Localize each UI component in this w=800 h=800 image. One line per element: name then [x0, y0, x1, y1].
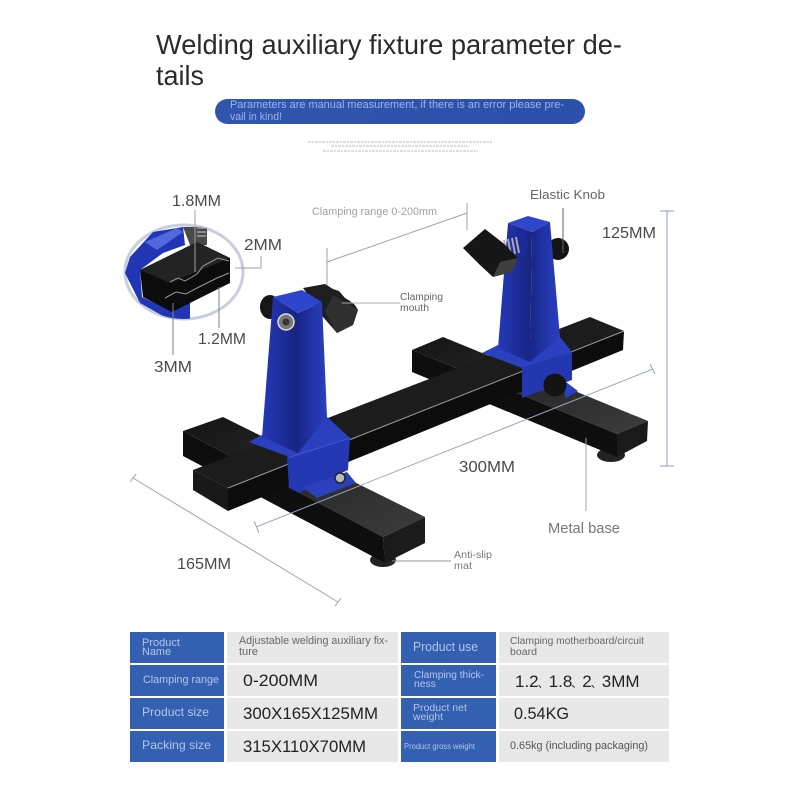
clamping range dimension [327, 203, 467, 285]
measurement labels [154, 193, 656, 573]
row: product net weight: Product net [413, 703, 467, 714]
callout: clamping range: Clamping range 0-200mm [312, 206, 437, 218]
left knob [260, 295, 280, 319]
row: clamping thickness: 1.2 [515, 672, 539, 691]
row: product net weight: weight [412, 712, 443, 723]
row: clamping thickness [401, 665, 669, 696]
row: product size [130, 698, 398, 729]
row: clamping thickness: ness [414, 679, 436, 690]
callout: metal base: Metal base [548, 521, 620, 537]
row: product name: Name [142, 646, 171, 658]
row: packing size: 315X110X70MM [243, 737, 366, 756]
row: product net weight: 0.54KG [514, 704, 569, 723]
title: Welding auxiliary fixture parameter de- [156, 29, 622, 60]
title: tails [156, 60, 204, 91]
row: product size: Product size [142, 705, 209, 719]
left blue column [249, 284, 358, 498]
row: product use [401, 632, 669, 663]
label 3MM: 3MM [154, 359, 192, 376]
dimension lines [130, 203, 674, 606]
callout: clamping mouth: mouth [400, 303, 429, 314]
product photo: soldering fixture [183, 216, 648, 567]
anti-slip mat leader [392, 560, 451, 562]
row: product use: board [510, 647, 537, 658]
label 2MM: 2MM [244, 237, 282, 254]
right bracket front [522, 352, 572, 398]
side screw [278, 314, 294, 330]
right clamp jaw [463, 229, 518, 277]
label 1.8MM: 1.8MM [172, 193, 221, 210]
metal base leader [585, 438, 587, 511]
1.2MM leader [218, 287, 220, 328]
row: clamping thickness: 、1.8、2、3MM [538, 672, 640, 691]
row: product net weight [401, 698, 669, 729]
label 165MM: 165MM [177, 556, 231, 573]
row: product size: 300X165X125MM [243, 704, 378, 723]
row: product name: Adjustable welding auxiliary fix- [239, 635, 388, 647]
row: packing size [130, 731, 398, 762]
subtitle banner [215, 99, 585, 124]
subtitle banner: Parameters are manual measurement, if there is an error please pre- [230, 99, 564, 111]
inset: clamp jaw detail [125, 225, 243, 320]
specification table [130, 632, 669, 762]
2MM leader [235, 256, 261, 268]
collar [518, 233, 528, 255]
row: product name [130, 632, 398, 663]
row: product name: Product [142, 637, 180, 649]
left tab with screw [302, 472, 356, 498]
row: clamping range: 0-200MM [243, 671, 318, 690]
label 125MM: 125MM [602, 225, 656, 242]
row: product gross weight: 0.65kg (including packaging) [510, 740, 648, 752]
label 300MM: 300MM [459, 459, 515, 476]
subtitle banner: vail in kind! [230, 111, 282, 123]
125MM dimension [660, 211, 674, 466]
left cross foot [183, 417, 425, 567]
right bracket top [482, 337, 572, 368]
row: product use: Clamping motherboard/circuit [510, 636, 644, 647]
clamping mouth leader [342, 302, 400, 304]
row: clamping range: Clamping range [143, 674, 219, 686]
main bar [193, 317, 624, 511]
callout: clamping mouth: Clamping [400, 292, 443, 303]
165MM dimension [130, 474, 341, 606]
row: product use: Product use [413, 640, 478, 654]
elastic knob leader [562, 208, 564, 253]
right tab [562, 382, 578, 398]
upper knob [547, 238, 569, 260]
callout: anti-slip mat: mat [454, 560, 472, 572]
3MM leader [172, 303, 174, 355]
label 1.2MM: 1.2MM [198, 331, 246, 348]
row: clamping range [130, 665, 398, 696]
callout: elastic knob: Elastic Knob [530, 188, 605, 202]
left clamp jaw [303, 284, 358, 333]
row: packing size: Packing size [142, 738, 211, 752]
lower knob [544, 374, 566, 396]
left bracket top [249, 417, 350, 458]
row: product name: ture [239, 646, 258, 658]
left bracket front [287, 438, 350, 493]
spring [504, 237, 519, 256]
row: product gross weight: Product gross weight [404, 742, 476, 751]
1.8MM leader [194, 210, 196, 272]
right blue column [463, 216, 578, 398]
row: clamping thickness: Clamping thick- [414, 670, 484, 681]
300MM dimension [254, 364, 655, 533]
callout: anti-slip mat: Anti-slip [454, 549, 492, 561]
right cross foot [412, 337, 648, 462]
row: product gross weight [401, 731, 669, 762]
